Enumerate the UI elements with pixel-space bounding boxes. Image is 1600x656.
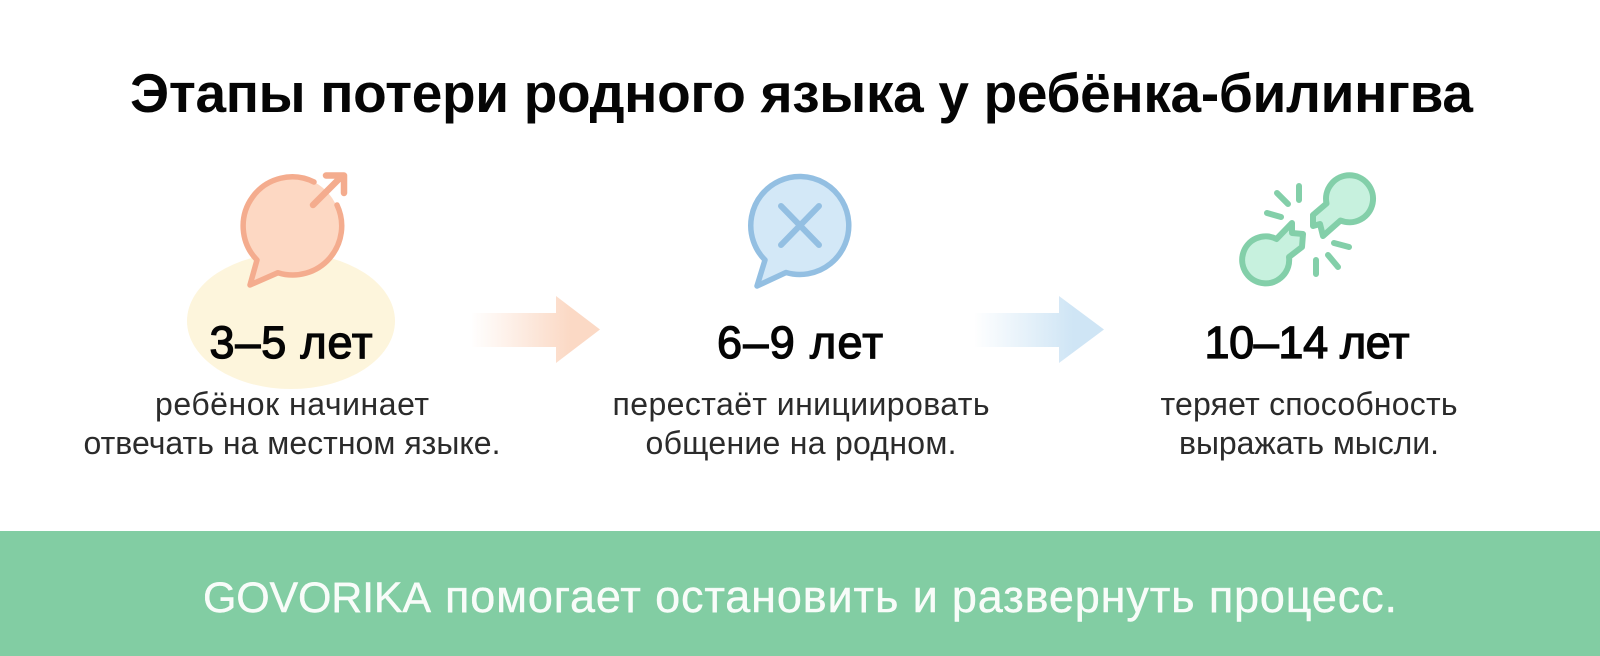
age label: 10–14 лет <box>1204 317 1410 368</box>
footer band <box>0 531 1600 656</box>
footer text: GOVORIKA <box>203 574 431 622</box>
icon: broken speech link <box>1242 175 1373 283</box>
icon: speech bubble with cross <box>751 176 849 286</box>
age label: 3–5 лет <box>210 317 372 368</box>
arrow: stage 2 to stage 3 <box>975 296 1104 363</box>
title: Этапы потери родного языка у ребёнка-билингва <box>130 62 1473 124</box>
age label: 6–9 лет <box>717 317 883 368</box>
icon: speech bubble with outgoing arrow <box>242 176 344 285</box>
panel: stage 3–5 years <box>84 176 500 461</box>
footer text: помогает остановить и развернуть процесс. <box>445 571 1397 622</box>
description: выражать мысли. <box>1179 425 1439 461</box>
arrow: stage 1 to stage 2 <box>472 296 600 363</box>
panel: stage 6–9 years <box>612 176 990 461</box>
panel: stage 10–14 years <box>1160 175 1458 461</box>
description: общение на родном. <box>646 425 956 461</box>
highlight circle <box>187 253 395 389</box>
description: отвечать на местном языке. <box>84 425 500 461</box>
description: перестаёт инициировать <box>612 386 990 422</box>
description: теряет способность <box>1160 386 1458 422</box>
description: ребёнок начинает <box>155 386 429 422</box>
